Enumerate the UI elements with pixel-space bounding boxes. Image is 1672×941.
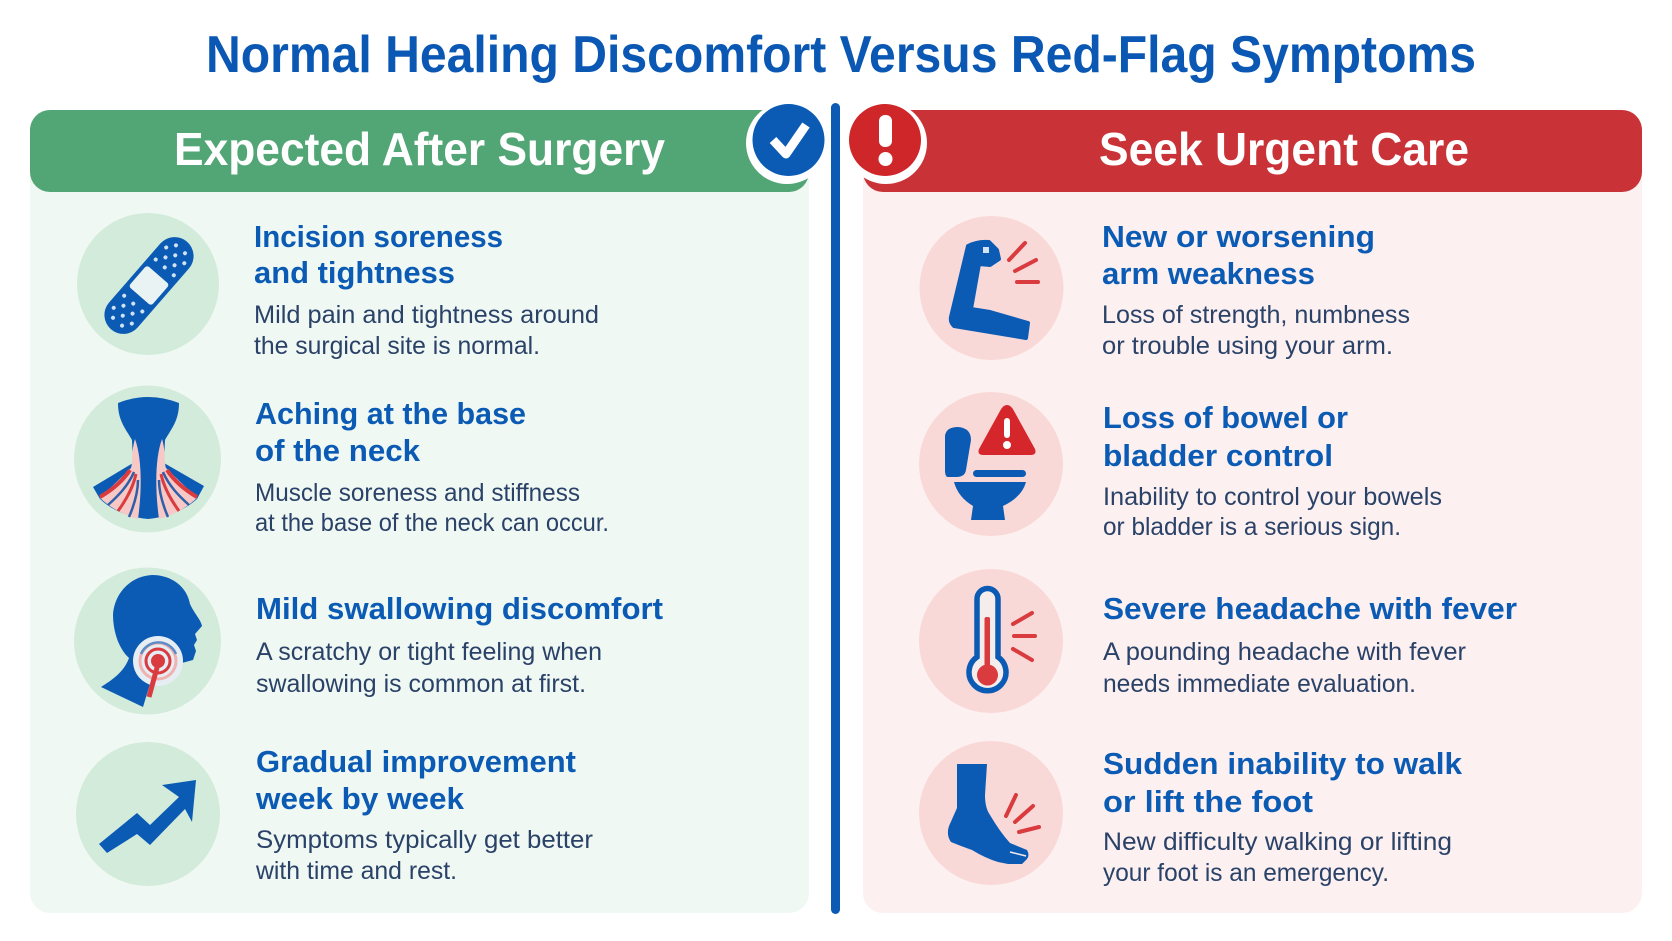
text: gradual improvement: week by week — [255, 781, 465, 816]
text: aching: at the base of the neck can occur. — [255, 509, 609, 537]
text: bowel bladder: bladder control — [1103, 438, 1333, 473]
text: arm weakness: or trouble using your arm. — [1102, 332, 1393, 360]
text: bowel bladder: Inability to control your bowels — [1103, 483, 1442, 511]
text: incision soreness: the surgical site is normal. — [254, 332, 540, 360]
title: Normal Healing Discomfort Versus Red-Flag Symptoms — [206, 26, 1476, 84]
panel header: urgent: Seek Urgent Care — [1099, 123, 1469, 175]
panel header: expected — [30, 110, 809, 192]
text: swallowing: Mild swallowing discomfort — [256, 591, 663, 626]
text: incision soreness: Mild pain and tightness around — [254, 301, 599, 329]
text: incision soreness: and tightness — [254, 255, 455, 290]
text: arm weakness: New or worsening — [1102, 219, 1375, 254]
text: inability to walk — [1103, 746, 1463, 887]
text: aching — [255, 396, 609, 537]
text: incision soreness: Incision soreness — [254, 219, 503, 254]
panel header: urgent — [863, 110, 1642, 192]
text: incision soreness — [254, 219, 599, 360]
text: swallowing: A scratchy or tight feeling when — [256, 638, 602, 666]
icon: thermometer — [919, 569, 1063, 713]
text: arm weakness: arm weakness — [1102, 256, 1315, 291]
text: inability to walk: New difficulty walking or lifting — [1103, 828, 1452, 856]
text: inability to walk: your foot is an emergency. — [1103, 859, 1389, 887]
text: arm weakness: Loss of strength, numbness — [1102, 301, 1410, 329]
text: aching: of the neck — [255, 433, 421, 468]
text: gradual improvement: Gradual improvement — [256, 744, 576, 779]
panel: seek urgent care — [863, 110, 1642, 913]
text: bowel bladder: or bladder is a serious sign. — [1103, 513, 1401, 541]
text: swallowing — [256, 591, 663, 698]
icon: toilet with warning — [919, 392, 1063, 536]
icon: neck muscles — [74, 386, 221, 532]
text: headache fever: A pounding headache with fever — [1103, 638, 1466, 666]
text: bowel bladder — [1103, 400, 1442, 541]
text: arm weakness — [1102, 219, 1410, 360]
center divider — [831, 103, 840, 914]
text: aching: Muscle soreness and stiffness — [255, 479, 580, 507]
text: aching: Aching at the base — [255, 396, 526, 431]
icon: exclamation badge — [845, 102, 927, 184]
panel header: expected: Expected After Surgery — [174, 123, 665, 175]
text: gradual improvement: Symptoms typically get better — [256, 826, 593, 854]
text: bowel bladder: Loss of bowel or — [1103, 400, 1348, 435]
icon: bandage — [77, 213, 219, 355]
text: headache fever — [1103, 591, 1517, 698]
icon: head with throat target — [74, 568, 221, 714]
text: headache fever: Severe headache with fever — [1103, 591, 1517, 626]
icon: arm weakness — [920, 216, 1064, 360]
icon: upward arrow — [76, 742, 220, 886]
text: headache fever: needs immediate evaluation. — [1103, 670, 1416, 698]
text: swallowing: swallowing is common at first. — [256, 670, 586, 698]
icon: check badge — [746, 102, 828, 184]
text: gradual improvement — [255, 744, 593, 885]
text: gradual improvement: with time and rest. — [255, 857, 457, 885]
icon: foot — [919, 741, 1063, 885]
text: inability to walk: Sudden inability to walk — [1103, 746, 1463, 781]
text: inability to walk: or lift the foot — [1103, 784, 1313, 819]
panel: expected after surgery — [30, 110, 809, 913]
